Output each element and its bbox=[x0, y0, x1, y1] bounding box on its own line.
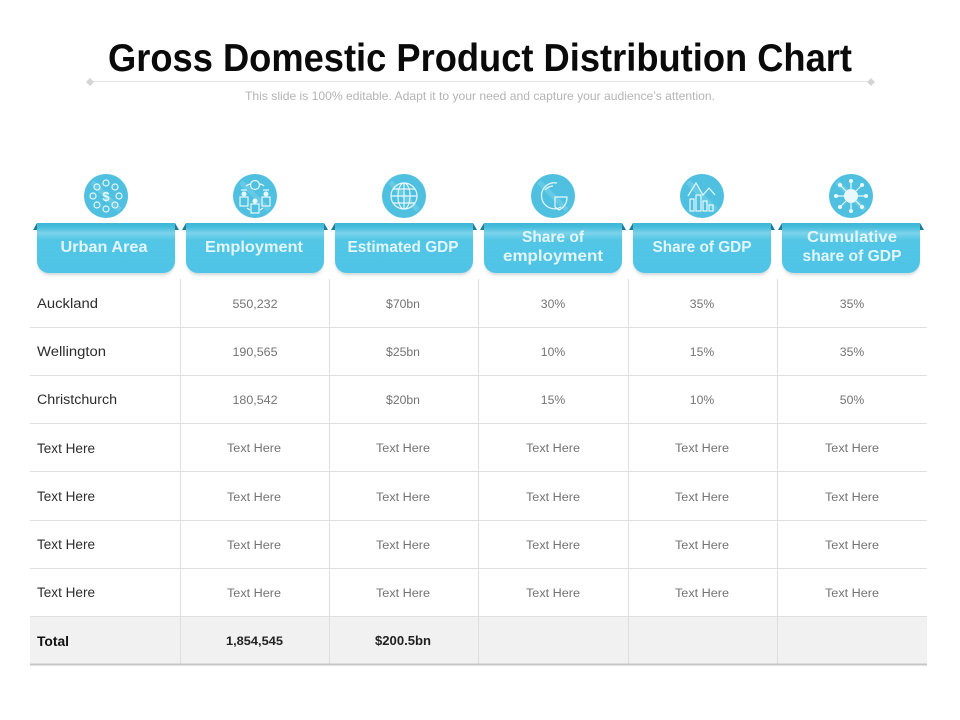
row: Auckland: 35% bbox=[690, 297, 714, 311]
header: Share of employment: Share of bbox=[522, 229, 585, 246]
row: Wellington bbox=[37, 344, 864, 359]
row: Text Here 3 bbox=[37, 537, 879, 552]
table bbox=[30, 279, 927, 664]
row: Text Here 4: Text Here bbox=[227, 586, 281, 600]
row: Text Here 3: Text Here bbox=[825, 538, 879, 552]
header: Share of employment bbox=[480, 223, 626, 275]
row: Text Here 4: Text Here bbox=[825, 586, 879, 600]
row: Text Here 3: Text Here bbox=[675, 538, 729, 552]
row: Text Here 3: Text Here bbox=[227, 538, 281, 552]
header: Employment: Employment bbox=[205, 239, 304, 256]
row: Text Here 1: Text Here bbox=[37, 441, 95, 456]
row: Wellington: 35% bbox=[840, 345, 864, 359]
header: Employment bbox=[182, 223, 328, 275]
row: Text Here 2 bbox=[37, 489, 879, 504]
header: Share of employment: employment bbox=[503, 248, 604, 265]
row: Christchurch: 15% bbox=[541, 393, 565, 407]
row: Text Here 2: Text Here bbox=[376, 490, 430, 504]
title: Gross Domestic Product Distribution Chart bbox=[108, 37, 852, 80]
row: Wellington: 10% bbox=[541, 345, 565, 359]
row: Wellington: 15% bbox=[690, 345, 714, 359]
icon: network burst bbox=[829, 174, 873, 218]
row: Text Here 1: Text Here bbox=[376, 441, 430, 455]
icon: urban area bbox=[84, 174, 128, 218]
icon: pie chart bbox=[531, 174, 575, 218]
header: Cumulative share of GDP: share of GDP bbox=[802, 248, 902, 265]
row: Christchurch: 180,542 bbox=[232, 393, 278, 407]
title divider with diamonds bbox=[86, 78, 875, 86]
row: Christchurch bbox=[37, 392, 864, 407]
row: Text Here 2: Text Here bbox=[825, 490, 879, 504]
row: Text Here 4: Text Here bbox=[37, 585, 95, 600]
row: Text Here 3: Text Here bbox=[526, 538, 580, 552]
header: Estimated GDP: Estimated GDP bbox=[348, 239, 459, 256]
header: Cumulative share of GDP: Cumulative bbox=[807, 229, 897, 246]
row: Wellington: Wellington bbox=[37, 344, 106, 359]
row: Text Here 1: Text Here bbox=[825, 441, 879, 455]
row: Text Here 1: Text Here bbox=[227, 441, 281, 455]
row: Total bbox=[37, 634, 431, 649]
row: Text Here 1 bbox=[37, 441, 879, 456]
row: Text Here 1: Text Here bbox=[526, 441, 580, 455]
row: Text Here 2: Text Here bbox=[526, 490, 580, 504]
row: Total: Total bbox=[37, 634, 69, 649]
icon: employment bbox=[233, 174, 277, 218]
subtitle: This slide is 100% editable. Adapt it to your need and capture your audience’s attention. bbox=[245, 89, 715, 103]
row: Text Here 3: Text Here bbox=[376, 538, 430, 552]
row: Text Here 4 bbox=[37, 585, 879, 600]
row: Text Here 2: Text Here bbox=[675, 490, 729, 504]
header: Cumulative share of GDP bbox=[778, 223, 924, 275]
row: Text Here 3: Text Here bbox=[37, 537, 95, 552]
row: Auckland: 35% bbox=[840, 297, 864, 311]
row: Text Here 4: Text Here bbox=[376, 586, 430, 600]
row: Wellington: $25bn bbox=[386, 345, 420, 359]
row: Auckland: $70bn bbox=[386, 297, 420, 311]
icon: globe bbox=[382, 174, 426, 218]
row: Text Here 2: Text Here bbox=[227, 490, 281, 504]
row: Text Here 4: Text Here bbox=[675, 586, 729, 600]
row: Total: 1,854,545 bbox=[226, 634, 283, 648]
icon: urban area: $ bbox=[102, 189, 110, 204]
row: Christchurch: $20bn bbox=[386, 393, 420, 407]
row: Text Here 2: Text Here bbox=[37, 489, 95, 504]
header: Urban Area bbox=[33, 223, 179, 275]
row: Christchurch: 50% bbox=[840, 393, 864, 407]
row: Text Here 1: Text Here bbox=[675, 441, 729, 455]
row: Text Here 4: Text Here bbox=[526, 586, 580, 600]
header: Share of GDP: Share of GDP bbox=[652, 239, 752, 256]
row: Christchurch: Christchurch bbox=[37, 392, 117, 407]
total row background bbox=[30, 616, 927, 664]
row: Auckland bbox=[37, 296, 864, 311]
row: Wellington: 190,565 bbox=[232, 345, 278, 359]
row: Total: $200.5bn bbox=[375, 634, 431, 648]
row: Christchurch: 10% bbox=[690, 393, 714, 407]
row: Auckland: 550,232 bbox=[232, 297, 278, 311]
icon: line and bar chart bbox=[680, 174, 724, 218]
header: Estimated GDP bbox=[331, 223, 477, 275]
row: Auckland: Auckland bbox=[37, 296, 98, 311]
row: Auckland: 30% bbox=[541, 297, 565, 311]
header: Share of GDP bbox=[629, 223, 775, 275]
header: Urban Area: Urban Area bbox=[60, 239, 148, 256]
